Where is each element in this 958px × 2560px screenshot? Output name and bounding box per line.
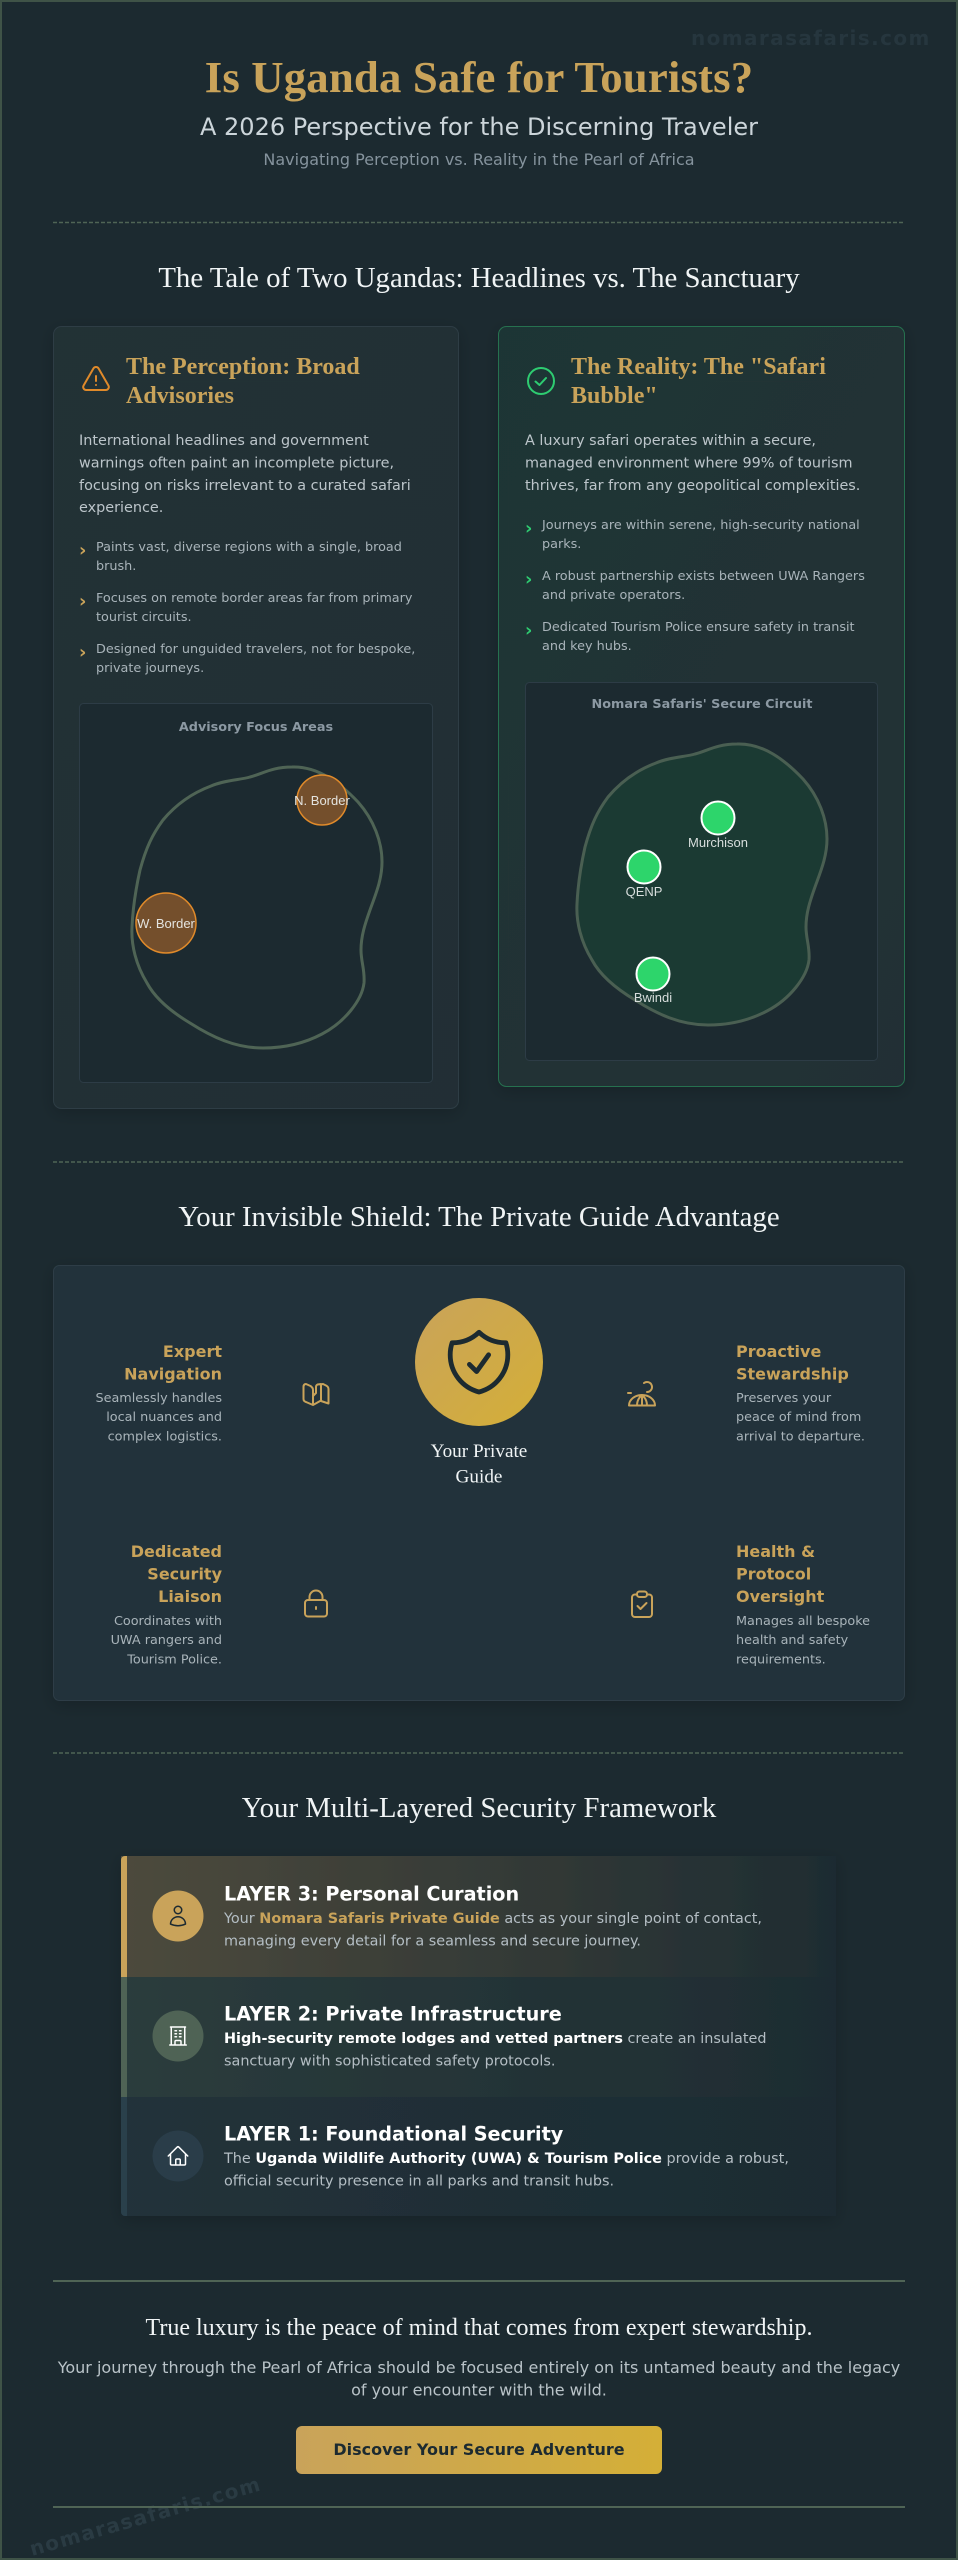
reality bullet list: A robust partnership exists between UWA Rangers	[542, 569, 865, 584]
perception heading: The Perception: Broad	[126, 354, 360, 380]
item: expert navigation	[95, 1342, 222, 1444]
reality bullet list: ›	[525, 569, 532, 590]
perception bullet list: private journeys.	[96, 661, 204, 676]
icon: map	[304, 1384, 328, 1405]
item: security liaison: Tourism Police.	[126, 1652, 222, 1667]
panel: perception	[54, 326, 458, 1108]
item: expert navigation: Navigation	[124, 1364, 222, 1383]
perception bullet list: ›	[79, 642, 86, 663]
layer 3: LAYER 3: Personal Curation	[224, 1882, 519, 1906]
map: secure circuit	[526, 682, 878, 1060]
item: security liaison: Dedicated	[131, 1542, 222, 1561]
item: proactive stewardship: Stewardship	[736, 1364, 849, 1383]
perception body text: focusing on risks irrelevant to a curated safari	[79, 478, 411, 494]
reality heading: The Reality: The "Safari	[571, 354, 826, 380]
panel: private guide	[54, 1266, 904, 1700]
tagline: Navigating Perception vs. Reality in the Pearl of Africa	[263, 150, 695, 169]
panel: reality	[498, 326, 904, 1086]
watermark bottom: nomarasafaris.com	[27, 2472, 264, 2560]
layer 2	[121, 1977, 836, 2097]
reality bullet list: parks.	[542, 537, 581, 552]
call to action button: Discover Your Secure Adventure	[333, 2440, 625, 2459]
item: security liaison: Security	[147, 1564, 223, 1583]
icon: guide with umbrella	[628, 1382, 655, 1406]
perception bullet list: ›	[79, 591, 86, 612]
item: security liaison: UWA rangers and	[111, 1633, 222, 1648]
closing statement: True luxury is the peace of mind that comes from expert stewardship.	[146, 2315, 812, 2341]
item: security liaison	[111, 1542, 223, 1667]
layer 1	[121, 2097, 836, 2216]
item: proactive stewardship: Preserves your	[736, 1391, 831, 1406]
item: health oversight	[736, 1542, 870, 1667]
item: proactive stewardship: arrival to departure.	[736, 1429, 865, 1444]
layer 3: managing every detail for a seamless and secure journey.	[224, 1933, 641, 1949]
reality bullet list: Dedicated Tourism Police ensure safety in transit	[542, 620, 855, 635]
item: expert navigation: local nuances and	[106, 1410, 222, 1425]
perception bullet list: brush.	[96, 559, 136, 574]
perception bullet list: Focuses on remote border areas far from primary	[96, 591, 412, 606]
map: advisory focus areas: W. Border	[137, 916, 196, 931]
item: health oversight: Oversight	[736, 1587, 825, 1606]
layer 1: The Uganda Wildlife Authority (UWA) & Tourism Police provide a robust,	[224, 2151, 789, 2167]
item: security liaison: Coordinates with	[114, 1614, 222, 1629]
title: Is Uganda Safe for Tourists?	[205, 52, 753, 102]
icon: warning triangle	[83, 367, 109, 390]
item: expert navigation: complex logistics.	[108, 1429, 222, 1444]
layer 3: Your Nomara Safaris Private Guide acts as your single point of contact,	[224, 1911, 762, 1927]
reality bullet list: ›	[525, 518, 532, 539]
map: advisory focus areas: N. Border	[294, 793, 350, 808]
perception bullet list: ›	[79, 540, 86, 561]
subtitle: A 2026 Perspective for the Discerning Traveler	[200, 113, 758, 141]
layer 2: LAYER 2: Private Infrastructure	[224, 2002, 562, 2026]
map: secure circuit: Murchison	[688, 835, 748, 850]
item: expert navigation: Expert	[163, 1342, 222, 1361]
watermark top: nomarasafaris.com	[691, 26, 931, 50]
perception body text: warnings often paint an incomplete picture,	[79, 455, 394, 471]
item: expert navigation: Seamlessly handles	[95, 1391, 222, 1406]
map: secure circuit: Bwindi	[634, 990, 672, 1005]
perception bullet list	[79, 540, 415, 676]
perception bullet list: Paints vast, diverse regions with a single, broad	[96, 540, 402, 555]
item: health oversight: Health &	[736, 1542, 815, 1561]
reality body text: A luxury safari operates within a secure,	[525, 433, 816, 449]
layer 1: LAYER 1: Foundational Security	[224, 2122, 564, 2146]
map: secure circuit: QENP	[626, 884, 662, 899]
perception body text: International headlines and government	[79, 433, 369, 449]
panel: security layers	[121, 1856, 836, 2216]
icon: check circle	[528, 368, 554, 394]
reality body text: managed environment where 99% of tourism	[525, 455, 852, 471]
guide label: Your Private	[431, 1441, 527, 1462]
reality heading: Bubble"	[571, 383, 658, 409]
closing paragraph: of your encounter with the wild.	[351, 2380, 607, 2399]
map: advisory focus areas	[80, 704, 432, 1082]
reality body text: thrives, far from any geopolitical complexities.	[525, 478, 860, 494]
layer 3	[121, 1856, 836, 1977]
icon: central guide shield	[415, 1298, 543, 1426]
item: health oversight: requirements.	[736, 1652, 826, 1667]
guide label: Guide	[456, 1466, 502, 1488]
section heading: framework: Your Multi-Layered Security Framework	[242, 1792, 717, 1824]
item: health oversight: Manages all bespoke	[736, 1614, 870, 1629]
reality bullet list	[525, 518, 865, 654]
reality bullet list: ›	[525, 620, 532, 641]
section heading: two Ugandas: The Tale of Two Ugandas: Headlines vs. The Sanctuary	[158, 262, 800, 294]
perception body text: experience.	[79, 500, 163, 516]
icon: clipboard check	[632, 1592, 652, 1617]
perception bullet list: Designed for unguided travelers, not for bespoke,	[96, 642, 415, 657]
reality bullet list: Journeys are within serene, high-security national	[542, 518, 860, 533]
perception bullet list: tourist circuits.	[96, 610, 192, 625]
item: proactive stewardship: Proactive	[736, 1342, 821, 1361]
item: proactive stewardship: peace of mind from	[736, 1410, 861, 1425]
item: proactive stewardship	[736, 1342, 865, 1444]
reality bullet list: and private operators.	[542, 588, 685, 603]
reality bullet list: and key hubs.	[542, 639, 632, 654]
icon: lock	[305, 1591, 327, 1616]
section heading: invisible shield: Your Invisible Shield: The Private Guide Advantage	[178, 1201, 780, 1233]
item: health oversight: Protocol	[736, 1564, 811, 1583]
map: secure circuit: Nomara Safaris' Secure Circuit	[592, 697, 812, 712]
item: security liaison: Liaison	[158, 1587, 222, 1606]
map: advisory focus areas: Advisory Focus Areas	[179, 720, 333, 735]
layer 1: official security presence in all parks and transit hubs.	[224, 2173, 614, 2189]
item: health oversight: health and safety	[736, 1633, 849, 1648]
layer 2: High-security remote lodges and vetted partners create an insulated	[224, 2031, 766, 2047]
call to action button	[296, 2426, 662, 2474]
layer 2: sanctuary with sophisticated safety protocols.	[224, 2053, 555, 2069]
closing paragraph: Your journey through the Pearl of Africa should be focused entirely on its untamed beauty and the legacy	[58, 2358, 900, 2377]
perception heading: Advisories	[126, 383, 234, 409]
